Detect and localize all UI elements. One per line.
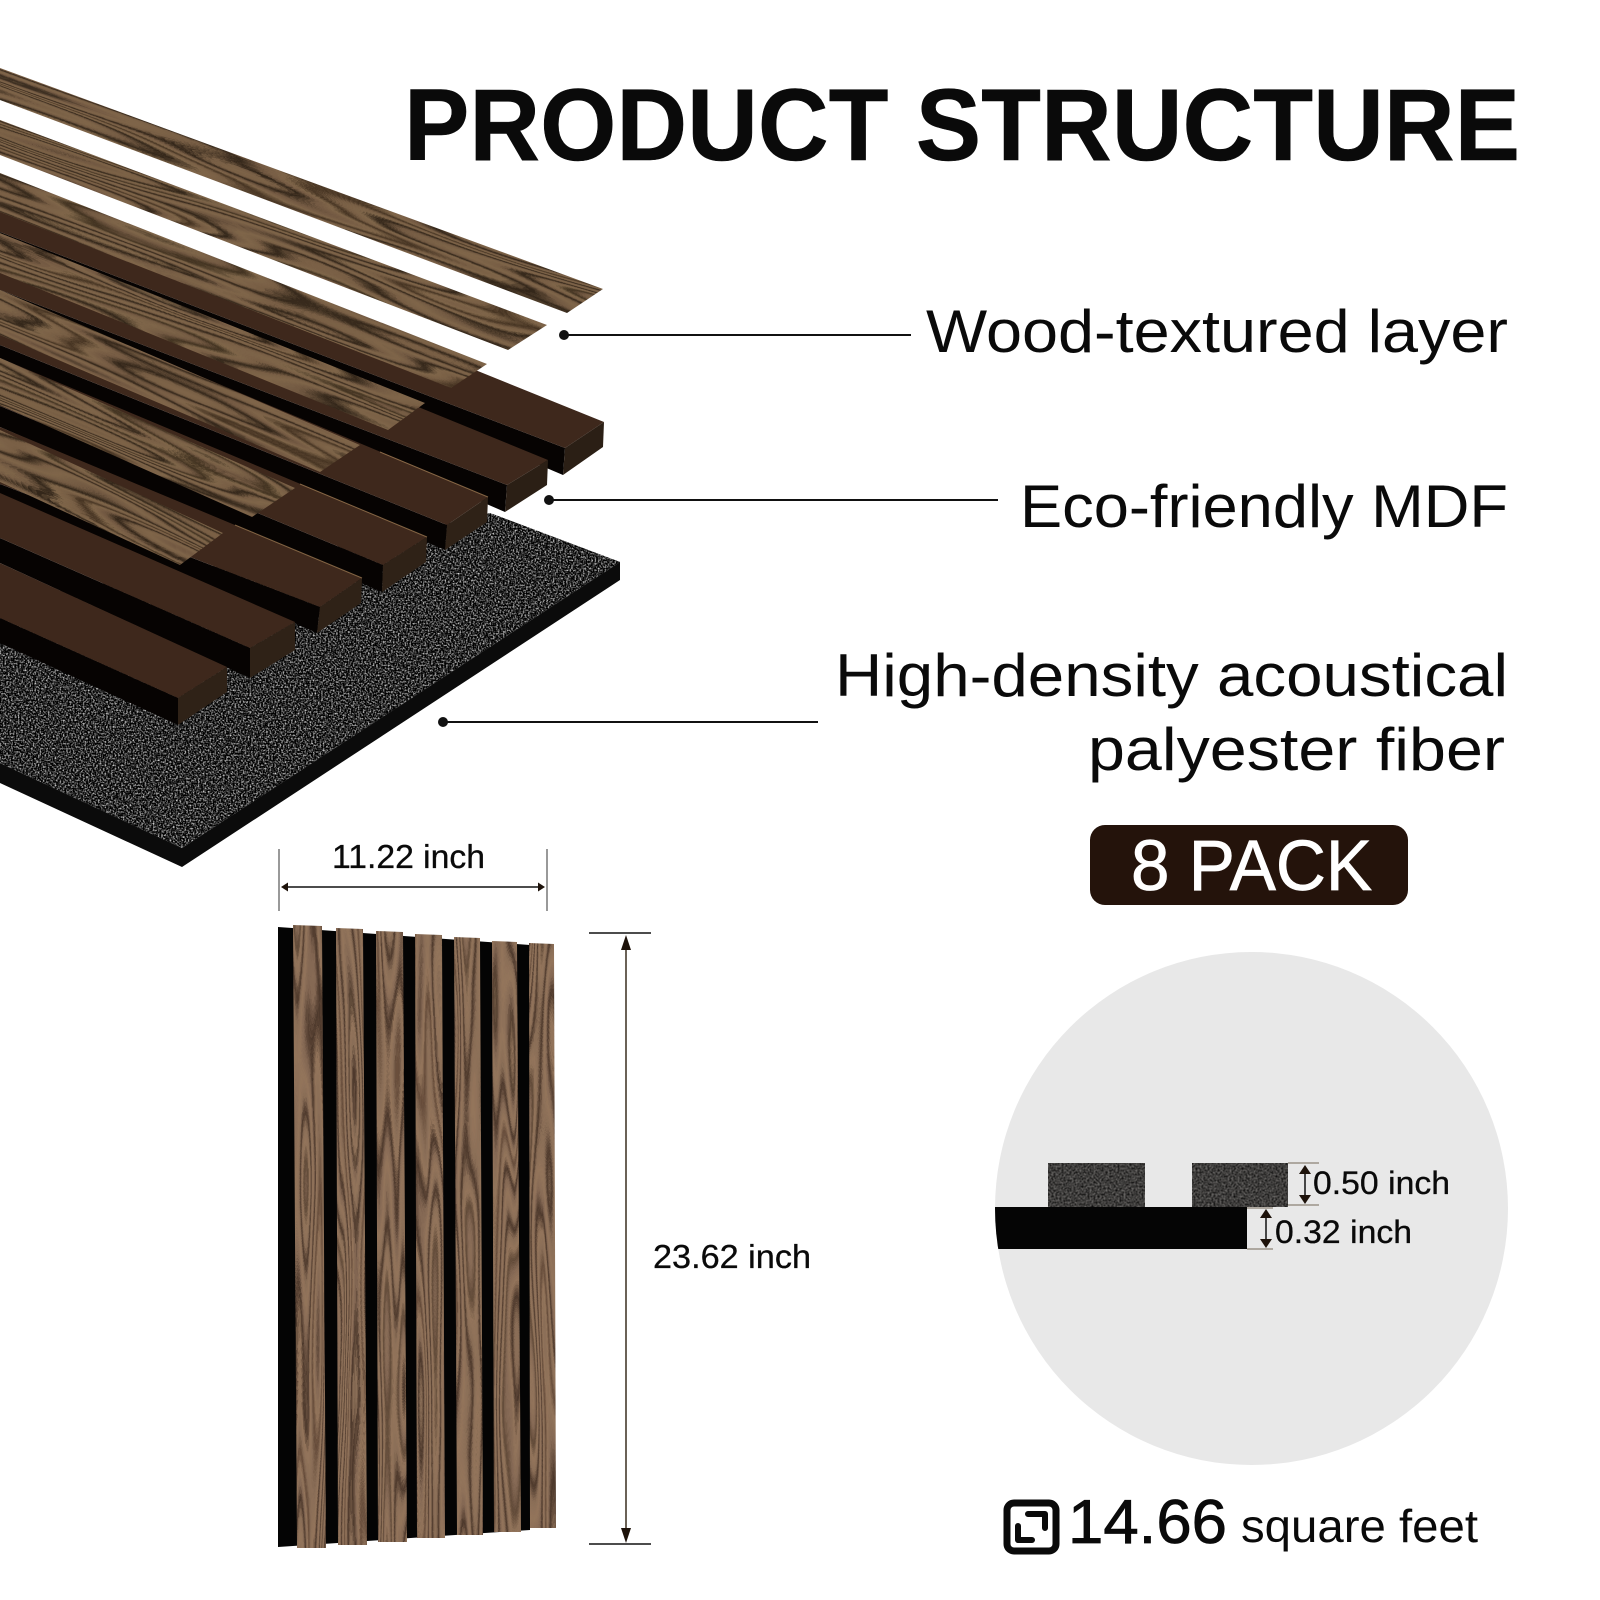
coverage area: square feet — [1241, 1500, 1478, 1552]
8 pack badge: 8 PACK — [1131, 827, 1372, 906]
callout: acoustical fiber: palyester fiber — [1088, 716, 1505, 783]
callout: eco-friendly MDF — [544, 473, 1508, 540]
callout: wood-textured layer — [559, 298, 1508, 365]
icon: expand square — [1007, 1503, 1056, 1551]
dimension 0.50 inch: 0.50 inch — [1313, 1165, 1450, 1201]
height dimension — [589, 933, 811, 1544]
width dimension — [279, 838, 547, 911]
coverage area: 14.66 — [1068, 1488, 1227, 1557]
exploded panel illustration — [0, 68, 620, 867]
dimension 0.50 inch — [1288, 1163, 1450, 1205]
dimension 0.32 inch: 0.32 inch — [1275, 1214, 1412, 1250]
cross-section slats — [1048, 1163, 1288, 1207]
cross-section circle — [990, 952, 1508, 1465]
title: PRODUCT STRUCTURE — [404, 68, 1520, 182]
wood slats — [293, 925, 556, 1548]
callout: wood-textured layer: Wood-textured layer — [926, 298, 1508, 365]
callout: acoustical fiber — [438, 642, 1508, 783]
width dimension: 11.22 inch — [332, 838, 485, 875]
black backing — [278, 927, 530, 1547]
vertical panel photo — [278, 915, 570, 1555]
callout: eco-friendly MDF: Eco-friendly MDF — [1020, 473, 1508, 540]
callout: acoustical fiber: High-density acoustical — [835, 642, 1508, 709]
MDF slat bars — [0, 178, 604, 725]
height dimension: 23.62 inch — [653, 1238, 811, 1275]
cross-section base — [990, 1207, 1247, 1249]
wood veneer strips — [0, 68, 603, 565]
dimension 0.32 inch — [1247, 1208, 1412, 1250]
coverage area — [1007, 1488, 1478, 1557]
acoustic felt base layer — [0, 500, 630, 867]
